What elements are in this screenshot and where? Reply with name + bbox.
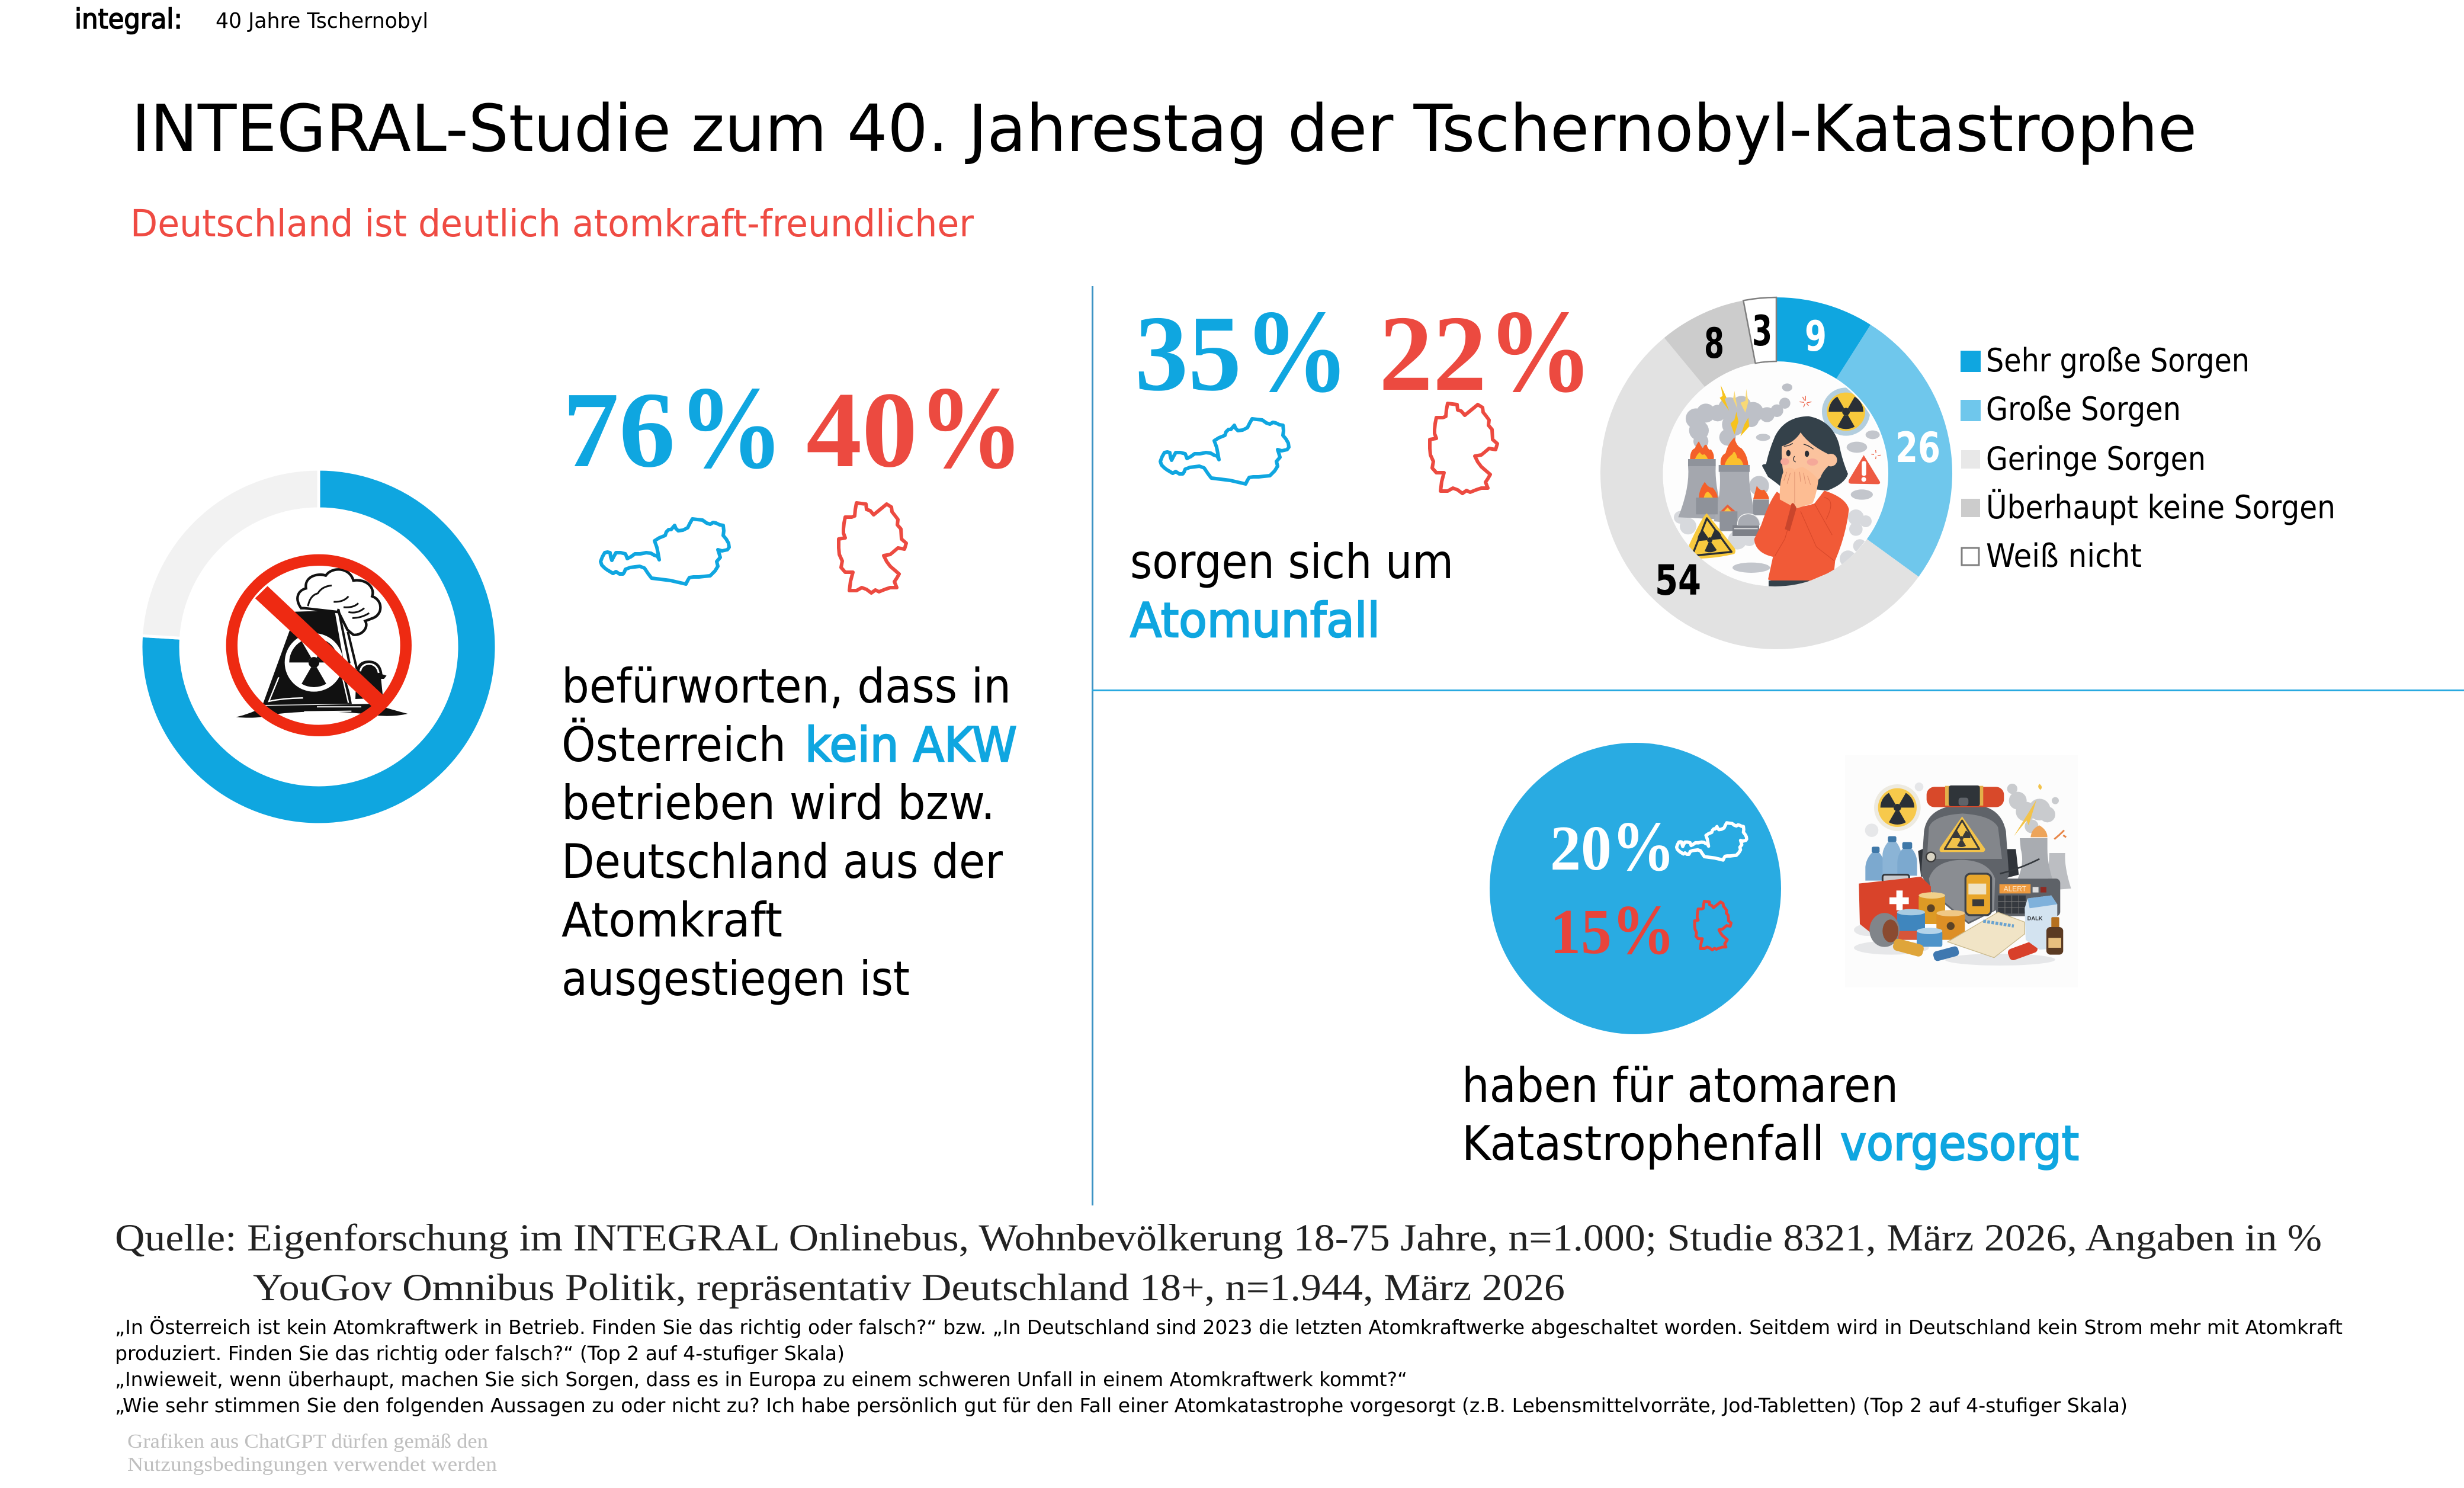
donut chart: level of worry: 8 xyxy=(1704,319,1724,368)
legend item: Sehr große Sorgen: Sehr große Sorgen xyxy=(1986,342,2250,379)
stat: Germany 22 percent: 22 xyxy=(1379,293,1487,413)
subtitle: Deutschland ist deutlich atomkraft-freundlicher xyxy=(130,202,974,245)
text block: support for no nuclear: Deutschland aus der xyxy=(562,834,1003,889)
source: Quelle: Eigenforschung im INTEGRAL Onlinebus, Wohnbevölkerung 18-75 Jahre, n=1.000; Studie 8321, März 2026, Angaben in % xyxy=(115,1217,2322,1259)
question wording: „Wie sehr stimmen Sie den folgenden Aussagen zu oder nicht zu? Ich habe persönlich gut für den Fall einer Atomkatastrophe vorgesorgt (z.B. Lebensmittelvorräte, Jod-Tabletten) (Top 2 auf 4-stufiger Skala) xyxy=(115,1394,2128,1417)
question wording xyxy=(115,1315,2343,1417)
legend xyxy=(1961,342,2335,575)
legend item: Weiß nicht: Weiß nicht xyxy=(1986,537,2142,575)
image credit: Grafiken aus ChatGPT dürfen gemäß den xyxy=(127,1431,488,1452)
donut chart: 76 percent xyxy=(141,469,496,825)
panel: worry about nuclear accident xyxy=(1130,286,2335,649)
header label: 40 Jahre Tschernobyl xyxy=(216,9,428,33)
icon: Germany outline xyxy=(839,503,906,593)
stat: Germany 15 percent: % xyxy=(1612,890,1675,969)
text block: prepared xyxy=(1462,1058,2079,1171)
stat: Austria 35 percent: % xyxy=(1244,286,1349,417)
stat: Austria 35 percent xyxy=(1135,286,1349,417)
image credit: Nutzungsbedingungen verwendet werden xyxy=(127,1454,497,1476)
question wording: produziert. Finden Sie das richtig oder falsch?“ (Top 2 auf 4-stufiger Skala) xyxy=(115,1342,845,1365)
text block: support for no nuclear xyxy=(562,659,1017,1006)
text block: prepared: haben für atomaren xyxy=(1462,1058,1898,1113)
text block: support for no nuclear: Österreich xyxy=(562,717,786,772)
horizontal divider xyxy=(1092,690,2464,691)
stat: Austria 35 percent: 35 xyxy=(1135,293,1241,413)
logo: integral: integral: xyxy=(75,3,182,35)
stat: Austria 20 percent xyxy=(1550,807,1675,886)
icon: crossed-out nuclear plant xyxy=(232,560,408,730)
icon: Austria outline xyxy=(601,519,729,584)
legend item: Überhaupt keine Sorgen: Überhaupt keine Sorgen xyxy=(1986,489,2335,526)
text block: support for no nuclear: ausgestiegen ist xyxy=(562,951,910,1006)
text block: support for no nuclear: kein AKW xyxy=(805,717,1017,772)
stat: Germany 22 percent: % xyxy=(1487,286,1593,417)
panel: preparedness xyxy=(1462,743,2079,1171)
title: INTEGRAL-Studie zum 40. Jahrestag der Tschernobyl-Katastrophe xyxy=(131,91,2197,166)
legend item: Große Sorgen: Große Sorgen xyxy=(1986,390,2181,428)
text block: worry: Atomunfall xyxy=(1130,593,1380,648)
question wording: „Inwieweit, wenn überhaupt, machen Sie sich Sorgen, dass es in Europa zu einem schweren Unfall in einem Atomkraftwerk kommt?“ xyxy=(115,1368,1407,1391)
stat: Germany 40 percent: 40 xyxy=(806,370,917,490)
stat: Austria 76 percent: % xyxy=(678,363,784,493)
text block: support for no nuclear: befürworten, dass in xyxy=(562,659,1011,714)
donut chart: level of worry xyxy=(1600,297,1952,649)
stat: Austria 76 percent xyxy=(563,363,784,493)
question wording: „In Österreich ist kein Atomkraftwerk in Betrieb. Finden Sie das richtig oder falsch?“ bzw. „In Deutschland sind 2023 die letzten Atomkraftwerke abgeschaltet worden. Seitdem wird in Deutschland kein Strom mehr mit Atomkraft xyxy=(115,1315,2343,1339)
text block: worry: sorgen sich um xyxy=(1130,534,1454,589)
icon: Germany outline xyxy=(1695,902,1731,950)
icon: Austria outline xyxy=(1677,823,1747,860)
donut chart: level of worry: 54 xyxy=(1655,556,1701,605)
stat: Germany 15 percent xyxy=(1550,890,1675,969)
stat: Germany 40 percent: % xyxy=(918,363,1024,493)
text block: worry xyxy=(1130,534,1454,648)
radio label: ALERT xyxy=(2004,885,2027,893)
stat: Austria 20 percent: 20 xyxy=(1550,813,1612,884)
circle with stats xyxy=(1490,743,1781,1034)
stat: Austria 20 percent: % xyxy=(1612,807,1675,886)
stat: Germany 40 percent xyxy=(806,363,1024,493)
source xyxy=(115,1217,2322,1309)
text block: support for no nuclear: Atomkraft xyxy=(562,893,782,948)
carton label: DALK xyxy=(2027,915,2043,921)
text block: prepared: vorgesorgt xyxy=(1840,1116,2079,1171)
donut chart: level of worry: 3 xyxy=(1752,307,1772,355)
icon: Germany outline xyxy=(1430,403,1497,493)
legend item: Geringe Sorgen: Geringe Sorgen xyxy=(1986,440,2206,477)
icon: Austria outline xyxy=(1160,419,1289,484)
vertical divider xyxy=(1092,286,1093,1205)
text block: prepared: Katastrophenfall xyxy=(1462,1116,1824,1171)
illustration: emergency kit backpack xyxy=(1845,755,2078,987)
illustration: worried woman and burning nuclear plant xyxy=(1663,362,1887,587)
stat: Austria 76 percent: 76 xyxy=(563,370,675,490)
panel: no nuclear power plant xyxy=(141,363,1024,1006)
donut chart: level of worry: 26 xyxy=(1895,424,1940,472)
image credit xyxy=(127,1431,497,1476)
text block: support for no nuclear: betrieben wird bzw. xyxy=(562,775,995,830)
donut chart: level of worry: 9 xyxy=(1805,312,1827,361)
stat: Germany 15 percent: 15 xyxy=(1550,897,1612,967)
source: YouGov Omnibus Politik, repräsentativ Deutschland 18+, n=1.944, März 2026 xyxy=(253,1266,1565,1309)
stat: Germany 22 percent xyxy=(1379,286,1593,417)
